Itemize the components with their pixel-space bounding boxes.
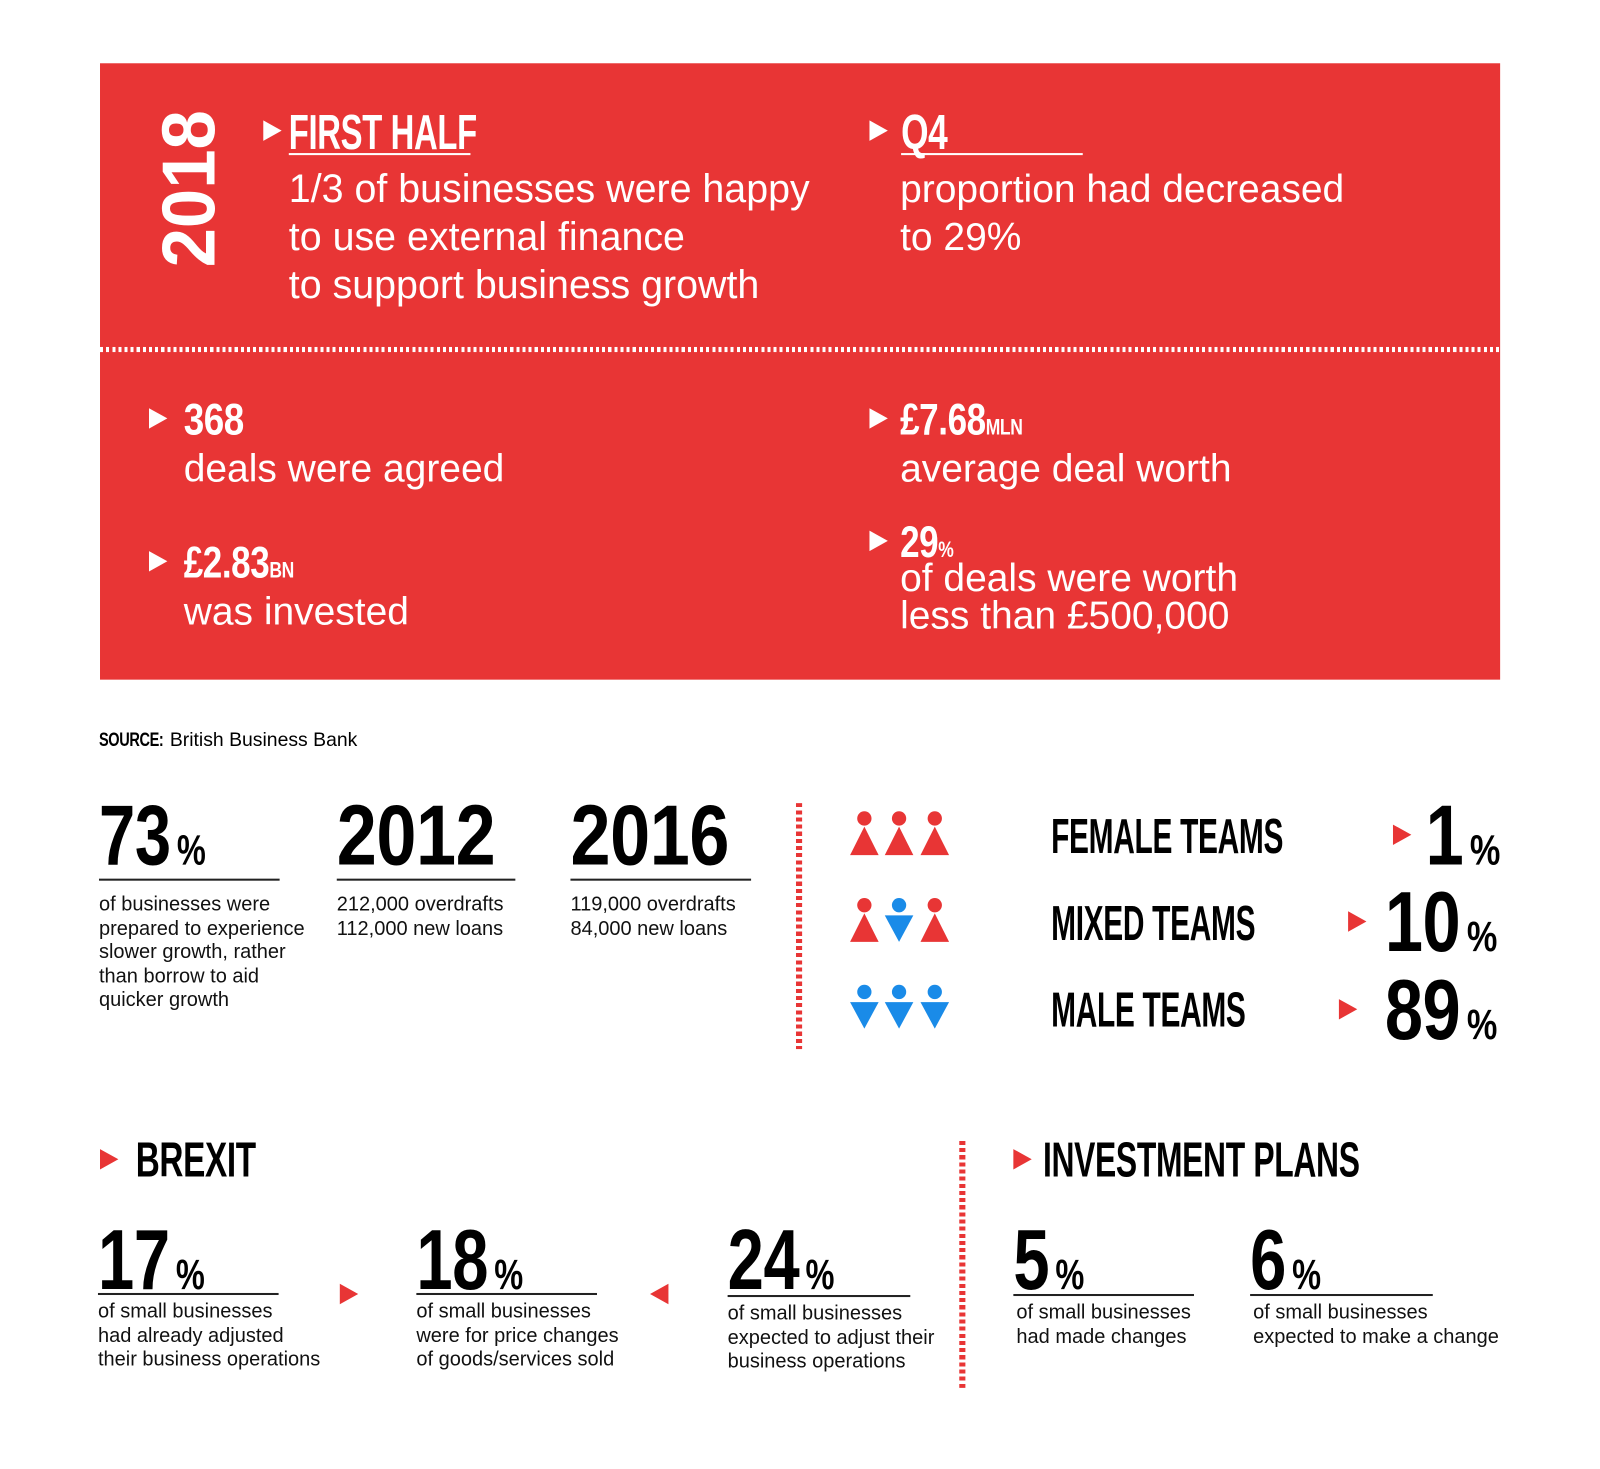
first half text: [289, 167, 810, 307]
first half heading: FIRST HALF: [289, 106, 477, 160]
stat: 17%: 17%: [98, 1211, 204, 1307]
stat: 368 deals: [149, 395, 504, 491]
value: 1%: 1%: [1426, 787, 1500, 883]
stat: 2012: [336, 787, 516, 939]
stat: 2012: 112,000 new loans: [337, 917, 503, 939]
stat: 2.83bn invested: [149, 538, 409, 634]
stat: 7.68mln average: [869, 395, 1232, 491]
stat: 17%: had already adjusted: [98, 1324, 284, 1347]
stat: 5%: 5%: [1013, 1211, 1084, 1307]
stat: 24%: expected to adjust their: [728, 1326, 934, 1349]
stat: 29% of deals: [869, 517, 1238, 638]
arrow: right: [340, 1284, 358, 1304]
stat: 73%: prepared to experience: [99, 917, 305, 939]
stat: 18%: of small businesses: [416, 1300, 591, 1323]
value: 89%: 89%: [1385, 961, 1497, 1057]
stat: 2012: 212,000 overdrafts: [337, 893, 504, 915]
panel: team gender split: [850, 787, 1500, 1057]
stat: 17%: [98, 1211, 320, 1371]
stat: 17%: their business operations: [98, 1348, 320, 1371]
stat: 18%: were for price changes: [416, 1324, 619, 1347]
stat: 5%: of small businesses: [1016, 1301, 1191, 1324]
value: 10%: 10%: [1385, 874, 1497, 969]
icon: female team figures: [850, 811, 949, 856]
label: mixed teams: MIXED TEAMS: [1051, 897, 1255, 951]
stat: 73%: slower growth, rather: [99, 941, 286, 963]
stat: 6%: of small businesses: [1253, 1301, 1428, 1324]
stat: 73%: [99, 787, 305, 1011]
stat: 5%: [1013, 1211, 1194, 1348]
stat: 73%: quicker growth: [99, 989, 229, 1011]
label: male teams: MALE TEAMS: [1051, 984, 1246, 1038]
stat: 2012: 2012: [337, 787, 495, 883]
stat: 2016: 119,000 overdrafts: [570, 893, 736, 915]
stat: 73%: 73%: [99, 787, 205, 883]
stat: 18%: 18%: [416, 1211, 523, 1307]
icon: mixed team figures: [850, 898, 949, 942]
Q4 text: [900, 167, 1344, 259]
first half text: to support business growth: [289, 263, 759, 307]
stat: 7.68mln average: £7.68MLN: [900, 395, 1022, 445]
stat: 29% of deals: 29%: [900, 517, 953, 567]
stat: 73%: than borrow to aid: [99, 965, 259, 987]
icon: male team figures: [850, 984, 949, 1029]
arrow: male: [1339, 999, 1357, 1019]
first half text: to use external finance: [289, 215, 685, 259]
stat: 5%: had made changes: [1016, 1325, 1187, 1348]
stat: 29% of deals: less than £500,000: [900, 594, 1229, 638]
stat: 2016: [570, 787, 752, 939]
stat: 6%: [1250, 1211, 1499, 1348]
Q4 text: proportion had decreased: [900, 167, 1344, 211]
stat: 73%: of businesses were: [99, 893, 270, 915]
source note: SOURCE:: [99, 730, 163, 751]
stat: 29% of deals: of deals were worth: [900, 556, 1238, 600]
arrow: left: [650, 1284, 668, 1304]
stat: 368 deals: 368: [184, 395, 244, 445]
stat: 18%: [416, 1211, 619, 1371]
stat: 7.68mln average: average deal worth: [900, 447, 1232, 491]
source note: British Business Bank: [170, 730, 357, 751]
stat: 24%: [728, 1211, 934, 1373]
heading: investment plans: INVESTMENT PLANS: [1043, 1134, 1360, 1188]
Q4 text: to 29%: [900, 215, 1021, 259]
stat: 24%: business operations: [728, 1350, 905, 1373]
heading: brexit: BREXIT: [136, 1134, 256, 1188]
stat: 24%: 24%: [728, 1211, 834, 1307]
first half text: 1/3 of businesses were happy: [289, 167, 810, 211]
arrow: female: [1393, 825, 1411, 845]
stat: 24%: of small businesses: [728, 1302, 902, 1325]
Q4 heading: Q4: [901, 106, 947, 160]
stat: 2016: 84,000 new loans: [570, 917, 727, 939]
stat: 6%: expected to make a change: [1253, 1325, 1499, 1348]
stat: 2.83bn invested: was invested: [184, 590, 409, 634]
stat: 18%: of goods/services sold: [416, 1348, 614, 1371]
stat: 2.83bn invested: £2.83BN: [184, 538, 294, 588]
Q4 heading: [869, 106, 1083, 160]
stat: 17%: of small businesses: [98, 1300, 272, 1323]
stat: 2016: 2016: [570, 787, 729, 883]
stat: 368 deals: deals were agreed: [184, 447, 504, 491]
label: female teams: FEMALE TEAMS: [1051, 810, 1283, 864]
panel: 2018 red stats box: [100, 63, 1500, 680]
arrow: mixed: [1348, 911, 1366, 932]
stat: 6%: 6%: [1250, 1211, 1321, 1307]
